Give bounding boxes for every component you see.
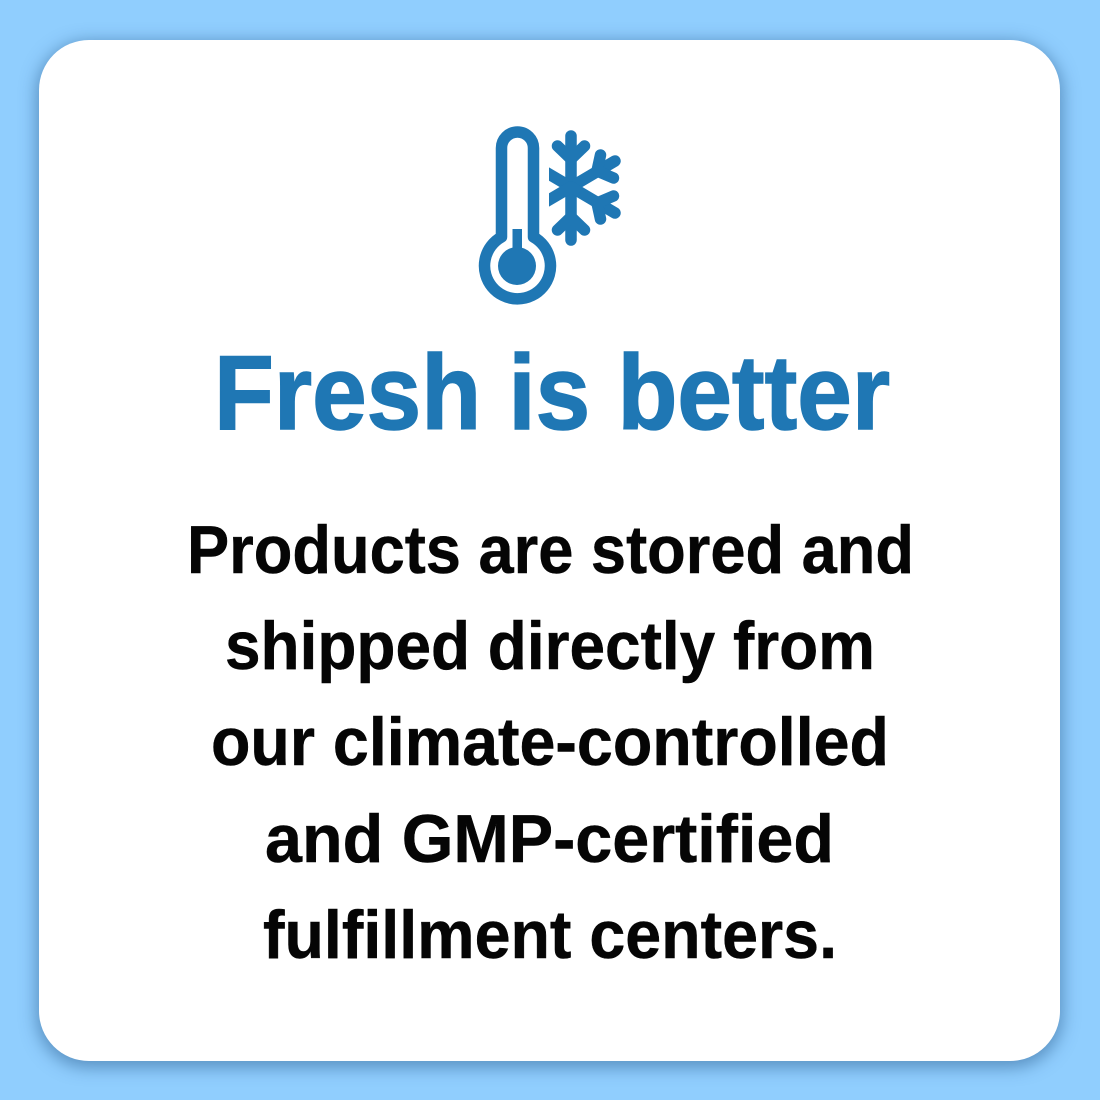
text block: description: fulfillment centers. (263, 897, 837, 973)
icon: thermometer (484, 132, 550, 299)
text block: description: and GMP-certified (265, 801, 834, 877)
icon: thermometer with snowflake (484, 132, 615, 299)
text block: description: our climate-controlled (211, 704, 889, 780)
text block: description (187, 512, 914, 973)
heading: Fresh is better (214, 334, 890, 452)
icon: snowflake (540, 136, 615, 240)
text block: description: shipped directly from (225, 608, 875, 684)
text block: description: Products are stored and (187, 512, 914, 588)
